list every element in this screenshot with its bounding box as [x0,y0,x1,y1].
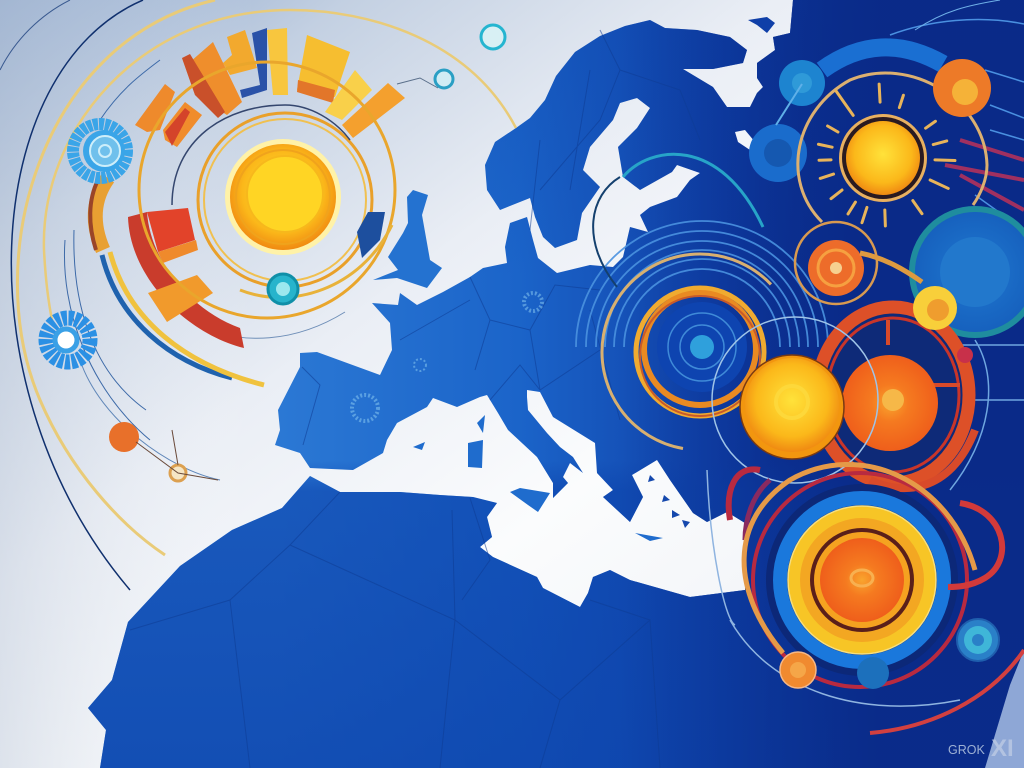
country borders [130,30,700,768]
Lake island [735,130,755,150]
icon: small teal node [435,70,453,88]
Aegean islands [648,475,690,528]
orange circle [842,355,938,451]
node: blue left [749,124,807,182]
Ireland blob [357,212,385,258]
thin connector [397,78,438,88]
light corner bottom right [985,650,1024,768]
islands: Mediterranean [413,415,663,541]
rod [860,253,922,282]
blocks [135,28,405,322]
large red ring [817,307,969,483]
icon: teal node [268,274,298,304]
top blue arc [822,47,943,70]
big teal circle [912,209,1024,335]
node: blue bottom [857,657,889,689]
streaks on right [890,0,1024,490]
thin light arc [707,470,960,706]
watermark [948,735,1014,762]
curved band: gold, blue and yellow [90,178,264,385]
outer orange arc [744,464,975,653]
pin connectors [136,430,218,480]
ring target: blue [586,238,814,466]
red arc [128,212,244,348]
node: orange top right [933,59,991,117]
Arctic inlet island [748,17,775,33]
icon: blue flower [46,318,90,362]
thin white circle [712,317,878,483]
icon: top teal node [481,25,505,49]
large bottom target [753,473,967,687]
concentric blue swirl lines [576,221,828,347]
watermark: XI [991,735,1014,762]
top sun [798,73,987,226]
rings around sun [139,62,395,318]
node: teal bottom [957,619,999,661]
red loop [948,503,1002,587]
landmass: Great Britain [373,190,442,288]
lower red arcs behind target [729,430,975,540]
central sun [225,139,341,255]
icon: small beige node [170,465,186,481]
yellow coin [740,355,844,459]
right circle cluster [576,0,1024,733]
icon: orange pin [109,422,139,452]
watermark: GROK [948,743,985,757]
node: orange middle [795,222,877,304]
red long arc [870,650,1024,733]
energy markers on land [352,293,542,421]
outer arcs [0,0,516,590]
node: blue top [779,60,825,106]
connector between blue nodes [776,84,802,125]
icon: blue gear [73,124,127,178]
red knob [957,347,973,363]
node: orange bottom [780,652,816,688]
sun rays [818,84,955,226]
left sun cluster [0,0,516,590]
small yellow node [913,286,957,330]
dark thin arc and teal arc [593,154,763,287]
